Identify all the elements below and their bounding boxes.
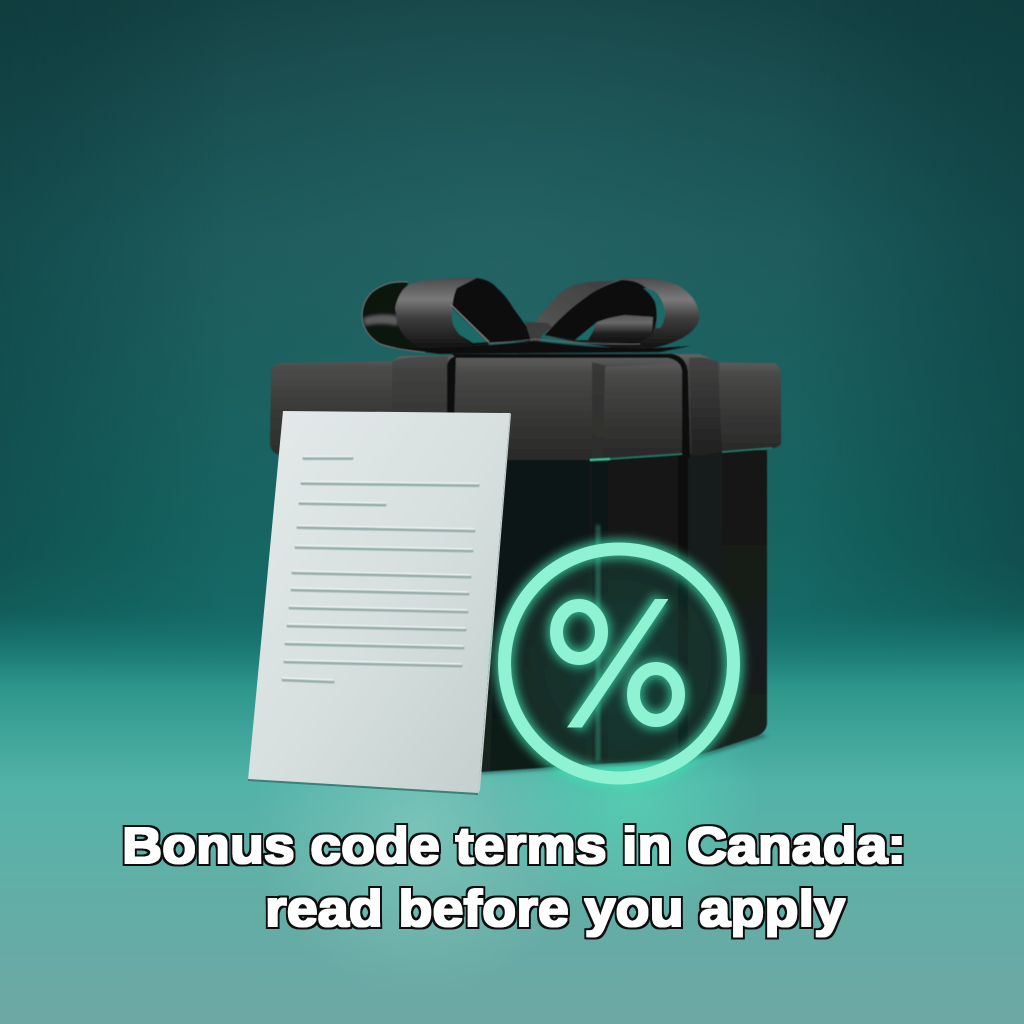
lid centre front panel bbox=[452, 360, 596, 460]
percent symbol bbox=[556, 599, 678, 728]
back left loop bbox=[362, 282, 440, 352]
title line 2: read before you apply bbox=[265, 880, 846, 937]
title bbox=[122, 817, 906, 937]
lid glow edge bbox=[590, 459, 610, 460]
neon percent badge bbox=[504, 549, 734, 778]
badge ring bbox=[504, 549, 734, 778]
badge glow bbox=[504, 549, 734, 778]
bow opening left bbox=[452, 308, 488, 343]
left loop inside bbox=[452, 278, 537, 345]
bow knot bbox=[525, 322, 552, 347]
right loop inside bbox=[545, 280, 657, 343]
back right ribbon bbox=[535, 280, 650, 340]
box body bbox=[480, 450, 768, 784]
paper text lines bbox=[283, 456, 478, 682]
box shadow bbox=[480, 730, 768, 774]
lid right panel bbox=[603, 363, 683, 459]
right inner fold bbox=[588, 315, 653, 343]
gift box bbox=[270, 277, 781, 784]
box lid bbox=[270, 354, 781, 460]
bow bbox=[362, 277, 699, 354]
lid ribbon right bbox=[689, 358, 722, 457]
paper sheet bbox=[248, 411, 510, 794]
document bbox=[248, 411, 511, 795]
lid ribbon left bbox=[392, 356, 448, 460]
right front loop bbox=[545, 278, 699, 348]
left front loop band bbox=[395, 277, 520, 351]
title line 1: Bonus code terms in Canada: bbox=[122, 817, 906, 874]
bow opening right bbox=[643, 288, 665, 328]
